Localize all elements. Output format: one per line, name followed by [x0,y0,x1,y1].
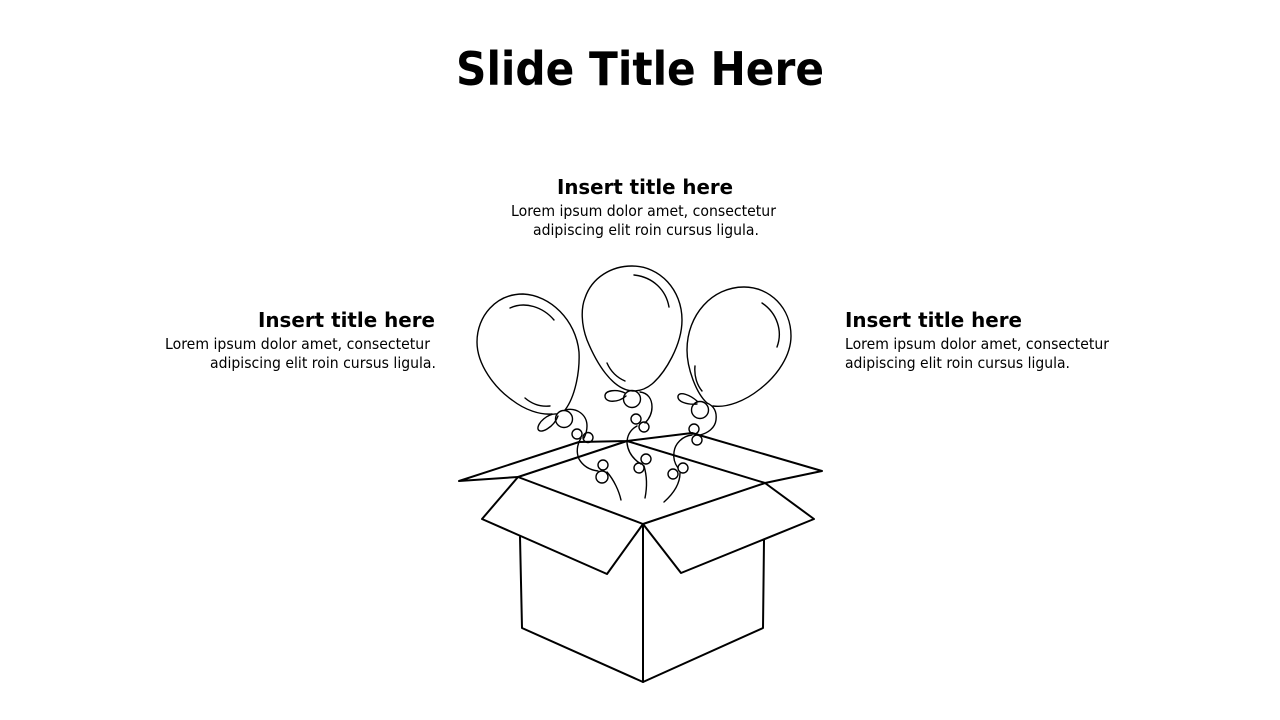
text block: top [511,175,777,239]
icon: right balloon [664,287,791,502]
text block: right: adipiscing elit roin cursus ligula. [845,354,1070,372]
icon: middle balloon [582,266,682,498]
text block: top: Insert title here [557,175,733,199]
icon: open box [459,433,822,682]
text block: right: Insert title here [845,308,1022,332]
text block: right: Lorem ipsum dolor amet, consectetur [845,335,1110,353]
text block: top: adipiscing elit roin cursus ligula. [533,221,759,239]
text block: top: Lorem ipsum dolor amet, consectetur [511,202,777,220]
title: Slide Title Here [456,42,824,96]
text block: left [165,308,436,372]
text block: left: Lorem ipsum dolor amet, consectetur [165,335,431,353]
icon: left balloon [477,294,621,500]
text block: right [845,308,1110,372]
text block: left: Insert title here [258,308,435,332]
text block: left: adipiscing elit roin cursus ligula. [210,354,436,372]
